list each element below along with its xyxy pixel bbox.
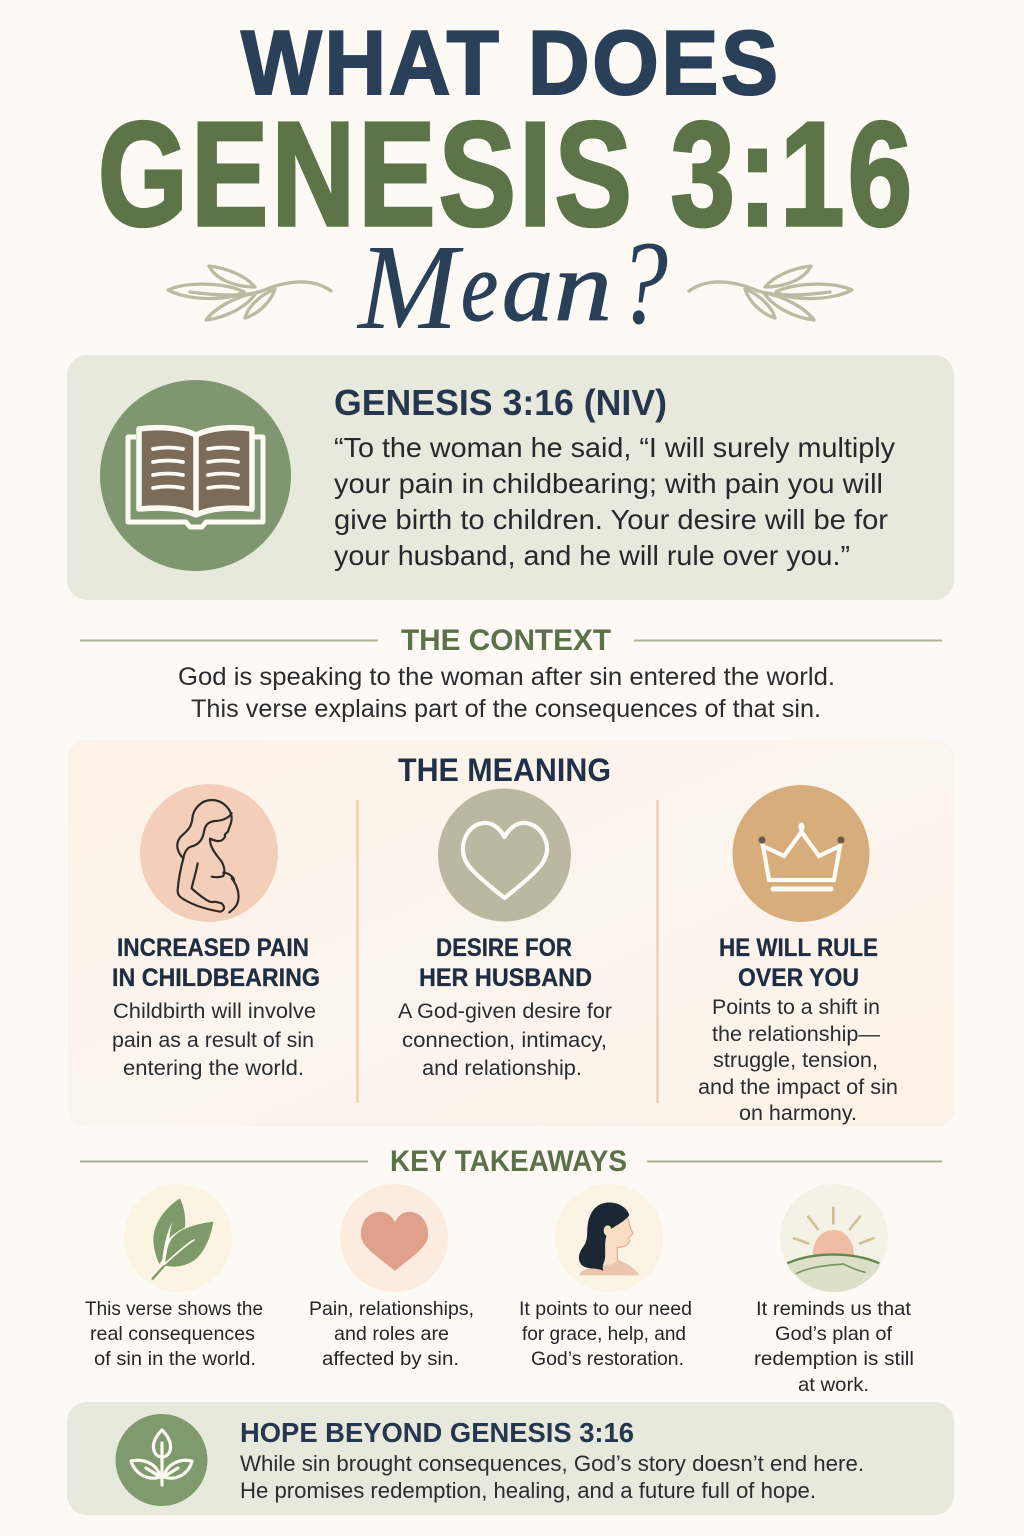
- context heading: THE CONTEXT: [401, 624, 611, 657]
- icon: sunrise: [780, 1184, 888, 1295]
- takeaway text: [85, 1298, 263, 1370]
- card text: struggle, tension,: [713, 1048, 878, 1072]
- panel: hope: [67, 1402, 954, 1515]
- takeaway text: real consequences: [90, 1323, 255, 1345]
- takeaway text: and roles are: [334, 1323, 449, 1345]
- icon: right laurel: [689, 266, 852, 320]
- card heading: HER HUSBAND: [419, 964, 592, 992]
- card text: Childbirth will involve: [113, 999, 316, 1023]
- card heading: HE WILL RULE: [719, 934, 878, 962]
- takeaways heading: KEY TAKEAWAYS: [390, 1145, 627, 1178]
- icon: left laurel: [168, 266, 331, 320]
- icon: sprout: [116, 1414, 208, 1506]
- takeaway: consequences: [85, 1184, 263, 1370]
- takeaway: relationships: [309, 1184, 474, 1370]
- context text: This verse explains part of the consequences of that sin.: [191, 695, 821, 723]
- card heading: DESIRE FOR: [436, 934, 572, 962]
- takeaway text: God’s restoration.: [531, 1348, 684, 1370]
- panel: the meaning: [68, 740, 955, 1127]
- card heading: [419, 934, 592, 992]
- card heading: OVER YOU: [738, 964, 859, 992]
- takeaway text: Pain, relationships,: [309, 1298, 474, 1320]
- card heading: IN CHILDBEARING: [112, 964, 320, 992]
- card text: Points to a shift in: [712, 995, 880, 1019]
- card text: entering the world.: [123, 1056, 304, 1080]
- title: M: [356, 220, 464, 355]
- takeaway: grace: [519, 1184, 692, 1370]
- meaning heading: THE MEANING: [398, 752, 611, 788]
- verse text: “To the woman he said, “I will surely multiply: [334, 432, 895, 463]
- card text: and relationship.: [422, 1056, 582, 1080]
- verse heading: GENESIS 3:16 (NIV): [334, 382, 667, 423]
- takeaway text: This verse shows the: [85, 1298, 263, 1320]
- takeaway text: at work.: [798, 1374, 869, 1396]
- card text: [698, 995, 898, 1125]
- card text: [112, 999, 316, 1080]
- panel: verse: [67, 355, 954, 600]
- icon: crown: [732, 785, 870, 922]
- title: GENESIS 3:16: [98, 92, 912, 257]
- card text: [398, 999, 612, 1080]
- title: e: [461, 231, 498, 342]
- card text: connection, intimacy,: [402, 1028, 607, 1052]
- takeaway text: [309, 1298, 474, 1370]
- icon: solid heart: [340, 1184, 448, 1292]
- verse text: your pain in childbearing; with pain you will: [334, 468, 883, 499]
- icon: pregnant woman: [140, 784, 278, 922]
- title: [98, 12, 912, 355]
- icon: heart outline: [438, 788, 571, 922]
- context text: God is speaking to the woman after sin entered the world.: [178, 663, 835, 691]
- title: n: [554, 231, 612, 342]
- card text: A God-given desire for: [398, 999, 612, 1023]
- takeaway text: [519, 1298, 692, 1370]
- icon: open book: [100, 380, 291, 571]
- card: increased pain: [112, 784, 320, 1080]
- card text: on harmony.: [739, 1101, 857, 1125]
- card heading: [719, 934, 878, 992]
- card text: pain as a result of sin: [112, 1028, 314, 1052]
- card text: the relationship—: [712, 1022, 880, 1046]
- title: a: [502, 231, 553, 342]
- takeaway text: for grace, help, and: [522, 1323, 686, 1345]
- card heading: [112, 934, 320, 992]
- verse text: [334, 432, 895, 571]
- section: key takeaways: [80, 1145, 942, 1396]
- hope text: While sin brought consequences, God’s story doesn’t end here.: [240, 1451, 864, 1476]
- takeaway text: It reminds us that: [756, 1298, 912, 1320]
- hope text: He promises redemption, healing, and a future full of hope.: [240, 1478, 816, 1503]
- hope text: [240, 1451, 864, 1503]
- card: desire: [398, 788, 612, 1080]
- verse text: your husband, and he will rule over you.”: [334, 540, 850, 571]
- card: rule: [698, 785, 898, 1125]
- title: WHAT DOES: [241, 12, 778, 114]
- takeaway text: redemption is still: [754, 1348, 914, 1370]
- context text: [178, 663, 835, 723]
- card heading: INCREASED PAIN: [117, 934, 309, 962]
- hope heading: HOPE BEYOND GENESIS 3:16: [240, 1417, 634, 1448]
- takeaway: redemption: [754, 1184, 914, 1396]
- takeaway text: [754, 1298, 914, 1396]
- section: the context: [80, 624, 942, 723]
- takeaway text: of sin in the world.: [94, 1348, 256, 1370]
- verse text: give birth to children. Your desire will be for: [334, 504, 888, 535]
- icon: woman profile: [555, 1184, 663, 1292]
- icon: leaf: [124, 1184, 232, 1292]
- card text: and the impact of sin: [698, 1075, 898, 1099]
- takeaway text: God’s plan of: [775, 1323, 893, 1345]
- takeaway text: affected by sin.: [322, 1348, 459, 1370]
- takeaway text: It points to our need: [519, 1298, 692, 1320]
- title: ?: [618, 216, 668, 349]
